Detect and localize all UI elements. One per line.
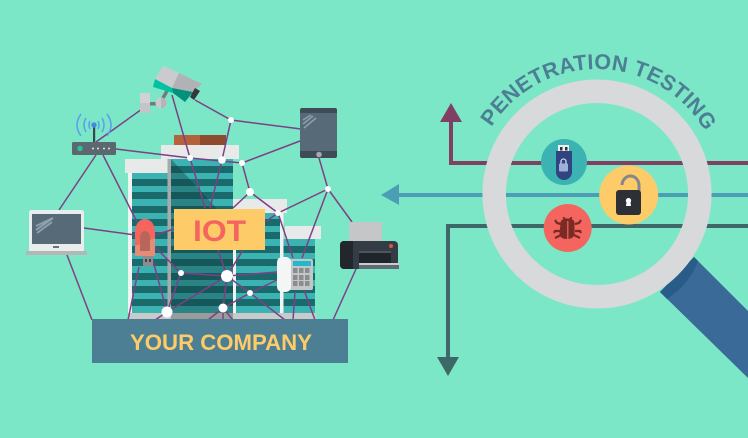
icon: security camera [140, 66, 202, 113]
building: right [232, 199, 287, 315]
IOT sign [174, 209, 265, 250]
icon: encrypted usb [541, 139, 587, 185]
icon: desk phone [277, 257, 313, 292]
banner: your company [92, 319, 348, 363]
building: left [125, 159, 170, 315]
magnifying glass [494, 91, 748, 378]
magnifier handle [660, 257, 748, 378]
banner: your company: YOUR COMPANY [130, 330, 312, 355]
icon: laptop [26, 210, 87, 255]
IOT sign: IOT [193, 215, 246, 248]
heading: penetration testing: PENETRATION TESTING [480, 54, 715, 129]
building: far right [279, 226, 321, 315]
icon: printer [340, 222, 399, 269]
icon: wifi router [72, 114, 116, 155]
network lines [59, 95, 356, 320]
arrow: maroon up [440, 103, 748, 163]
icon: tablet [300, 108, 337, 158]
icon: open padlock [599, 166, 658, 224]
building cluster [125, 135, 321, 320]
icon: bug [544, 204, 592, 252]
building: centre tower [128, 135, 316, 320]
icon: usb stick [135, 219, 155, 266]
magnifier ring [494, 91, 700, 297]
arrow: dark down [437, 226, 748, 376]
arrow: blue left [381, 184, 748, 205]
network nodes [162, 117, 331, 318]
